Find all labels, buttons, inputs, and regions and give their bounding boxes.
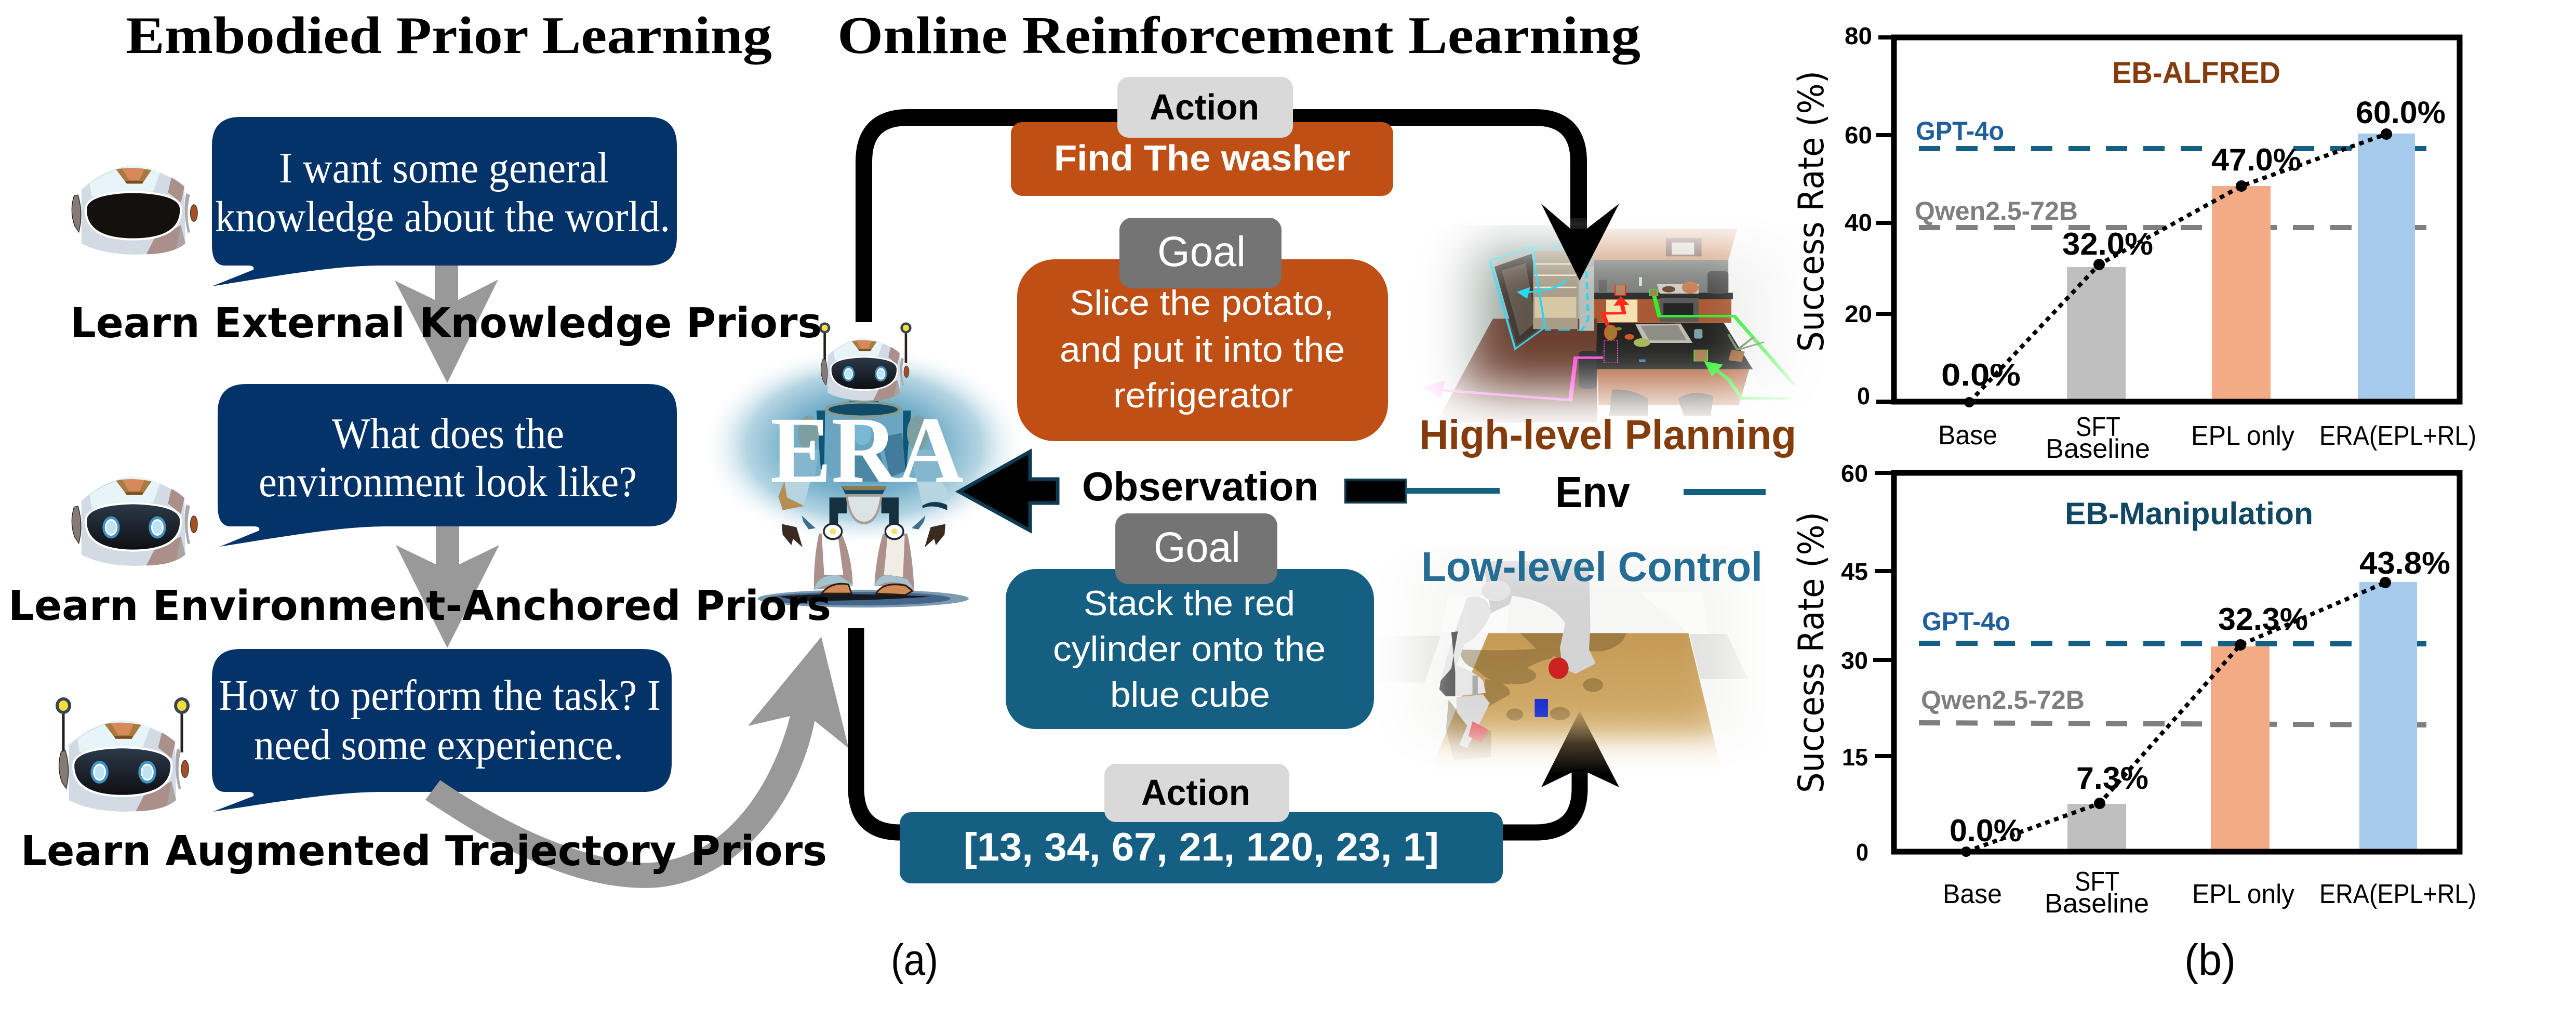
- value labels: 60.0%: [2356, 95, 2446, 130]
- connector dash: [1684, 489, 1766, 495]
- panel: high-level goal: and put it into the: [1060, 330, 1345, 369]
- y tick labels: 0: [1857, 382, 1870, 409]
- chart: EB-Manipulation success rate: [1791, 460, 2476, 919]
- speech bubble: external knowledge: I want some general: [279, 144, 609, 192]
- panel: high-level action: Action: [1150, 87, 1259, 127]
- y ticks: [1876, 37, 1893, 402]
- observation label: Observation: [1082, 464, 1318, 509]
- trend points: [1964, 128, 2392, 407]
- x axis labels: Base: [1943, 879, 2002, 909]
- connector line: [1406, 488, 1500, 494]
- action tag: [1117, 77, 1293, 138]
- label: Qwen2.5-72B: Qwen2.5-72B: [1915, 196, 2078, 226]
- speech bubble: external knowledge: [212, 117, 677, 286]
- reference line: Qwen2.5-72B: [1919, 225, 2427, 230]
- chart title: EB-ALFRED: [2112, 56, 2280, 90]
- value labels: 0.0%: [1950, 813, 2022, 848]
- reference line: GPT-4o: [1919, 643, 2427, 644]
- glow: [700, 345, 1027, 547]
- robot figure: [757, 322, 969, 607]
- action vector box: [900, 812, 1503, 883]
- y tick labels: 30: [1841, 647, 1868, 674]
- bar: ERA: [2358, 134, 2415, 402]
- robot agent with blue glow: [700, 322, 1027, 607]
- bar: SFT Baseline: [2067, 804, 2126, 850]
- speech bubble: experience: need some experience.: [254, 721, 623, 769]
- dotted trend line: [1969, 134, 2386, 402]
- x axis labels: ERA(EPL+RL): [2319, 421, 2476, 451]
- y tick labels: [1845, 22, 1872, 409]
- env label: Env: [1555, 468, 1630, 517]
- chart title: EB-Manipulation: [2065, 496, 2313, 531]
- y tick labels: 15: [1842, 744, 1868, 771]
- observation arrow: [959, 452, 1058, 531]
- text: ERA: ERA: [770, 398, 964, 502]
- goal box: [1017, 259, 1388, 441]
- bar: ERA: [2359, 582, 2417, 850]
- robot head: [821, 338, 909, 401]
- speech bubble: environment: What does the: [332, 409, 564, 458]
- x axis labels: EPL only: [2192, 879, 2294, 909]
- label: GPT-4o: GPT-4o: [1922, 607, 2010, 636]
- frame: [1894, 473, 2460, 852]
- curved arrow: priors to ERA: [425, 637, 849, 888]
- x axis labels: [1938, 412, 2476, 464]
- label: Qwen2.5-72B: Qwen2.5-72B: [1921, 685, 2085, 714]
- panel: low-level goal: Goal: [1154, 524, 1240, 571]
- image: robot arm tabletop for low-level control: [1402, 561, 1748, 773]
- y tick labels: 40: [1845, 209, 1872, 236]
- value labels: [1941, 95, 2446, 392]
- panel: high-level goal: Slice the potato,: [1070, 283, 1334, 323]
- frame: [1894, 37, 2460, 402]
- bar: SFT Baseline: [2067, 267, 2126, 400]
- icon: robot head with eyes and antennae: [56, 697, 190, 812]
- reference line: GPT-4o: [1919, 146, 2427, 151]
- value labels: 32.0%: [2062, 227, 2153, 261]
- x axis labels: Base: [1938, 420, 1997, 451]
- panel: high-level goal: Goal: [1157, 228, 1246, 275]
- goal tag: [1115, 513, 1277, 584]
- loop line: top action path: [864, 117, 1579, 322]
- value labels: 47.0%: [2211, 142, 2301, 177]
- panel: high-level action: [1011, 77, 1393, 196]
- x axis labels: SFT: [2075, 867, 2119, 897]
- y ticks: [1873, 473, 1893, 756]
- panel: low-level goal: [1006, 513, 1374, 729]
- x axis labels: SFT: [2076, 412, 2120, 442]
- speech bubble: environment: [218, 384, 677, 547]
- reference line: Qwen2.5-72B: [1919, 723, 2427, 725]
- connector block: [1345, 480, 1406, 502]
- goal box: [1006, 569, 1374, 729]
- trend points: [1961, 577, 2391, 857]
- panel: low-level action: Action: [1141, 772, 1250, 813]
- image: kitchen scene for high-level planning: [1423, 218, 1796, 422]
- bar: EPL only: [2212, 186, 2271, 402]
- loop line: bottom action path: [856, 628, 1580, 832]
- action result box: [1011, 122, 1393, 196]
- arrow head: action into tabletop scene: [1541, 711, 1619, 787]
- bar: EPL only: [2211, 646, 2270, 850]
- panel: high-level goal: [1017, 218, 1388, 441]
- goal tag: [1119, 218, 1282, 288]
- x axis labels: Baseline: [2046, 434, 2150, 464]
- panel: low-level goal: cylinder onto the: [1053, 629, 1326, 669]
- y tick labels: 0: [1856, 839, 1868, 866]
- x axis labels: EPL only: [2191, 421, 2294, 451]
- panel: low-level goal: blue cube: [1110, 675, 1270, 714]
- y axis title: Success Rate (%): [1791, 71, 1832, 352]
- arrow: second prior down to third prior: [396, 522, 499, 648]
- title: Online Reinforcement Learning: Online Reinforcement Learning: [837, 6, 1640, 65]
- speech bubble: experience: [212, 649, 672, 812]
- y tick labels: 60: [1845, 122, 1872, 149]
- label: Learn External Knowledge Priors: Learn External Knowledge Priors: [70, 299, 822, 347]
- chart: EB-ALFRED success rate: [1791, 22, 2476, 464]
- panel: low-level action: [13, 34, 67, 21, 120, 23, 1]: [964, 825, 1439, 869]
- x axis labels: Baseline: [2045, 889, 2149, 919]
- caption: (b): (b): [2184, 935, 2236, 984]
- icon: robot head with dark visor: [72, 165, 197, 255]
- value labels: [1950, 546, 2450, 848]
- speech bubble: external knowledge: knowledge about the world.: [215, 193, 670, 241]
- x axis labels: [1943, 867, 2476, 919]
- observation row: Env to ERA: [959, 452, 1766, 531]
- label backing: [2203, 144, 2293, 153]
- panel: high-level action: Find The washer: [1054, 138, 1351, 178]
- speech bubble: experience: How to perform the task? I: [219, 671, 661, 720]
- label: Learn Augmented Trajectory Priors: Learn Augmented Trajectory Priors: [21, 827, 827, 875]
- caption: (a): (a): [891, 935, 938, 984]
- arrow: first prior down to second prior: [395, 260, 498, 383]
- y tick labels: 20: [1845, 300, 1872, 327]
- label: High-level Planning: High-level Planning: [1419, 412, 1796, 458]
- y axis title: Success Rate (%): [1791, 512, 1832, 793]
- value labels: 0.0%: [1941, 358, 2021, 392]
- panel: high-level goal: refrigerator: [1113, 376, 1293, 415]
- y tick labels: 45: [1841, 558, 1868, 585]
- value labels: 32.3%: [2218, 602, 2308, 637]
- panel: low-level action: [900, 764, 1503, 883]
- action tag: [1104, 764, 1289, 822]
- y tick labels: 80: [1845, 22, 1872, 49]
- value labels: 43.8%: [2359, 546, 2450, 580]
- dotted trend line: [1966, 583, 2385, 852]
- arrow head: action into kitchen scene: [1541, 204, 1619, 281]
- label: GPT-4o: GPT-4o: [1916, 116, 2004, 145]
- panel: low-level goal: Stack the red: [1084, 584, 1295, 623]
- label: Learn Environment-Anchored Priors: Learn Environment-Anchored Priors: [8, 582, 831, 630]
- title: Embodied Prior Learning: Embodied Prior Learning: [126, 6, 772, 65]
- y tick labels: [1841, 460, 1868, 866]
- icon: robot head with eyes: [72, 477, 197, 566]
- value labels: 7.3%: [2076, 761, 2148, 796]
- x axis labels: ERA(EPL+RL): [2319, 879, 2476, 909]
- speech bubble: environment: environment look like?: [259, 458, 637, 506]
- label: Low-level Control: Low-level Control: [1421, 544, 1763, 590]
- y tick labels: 60: [1841, 460, 1868, 487]
